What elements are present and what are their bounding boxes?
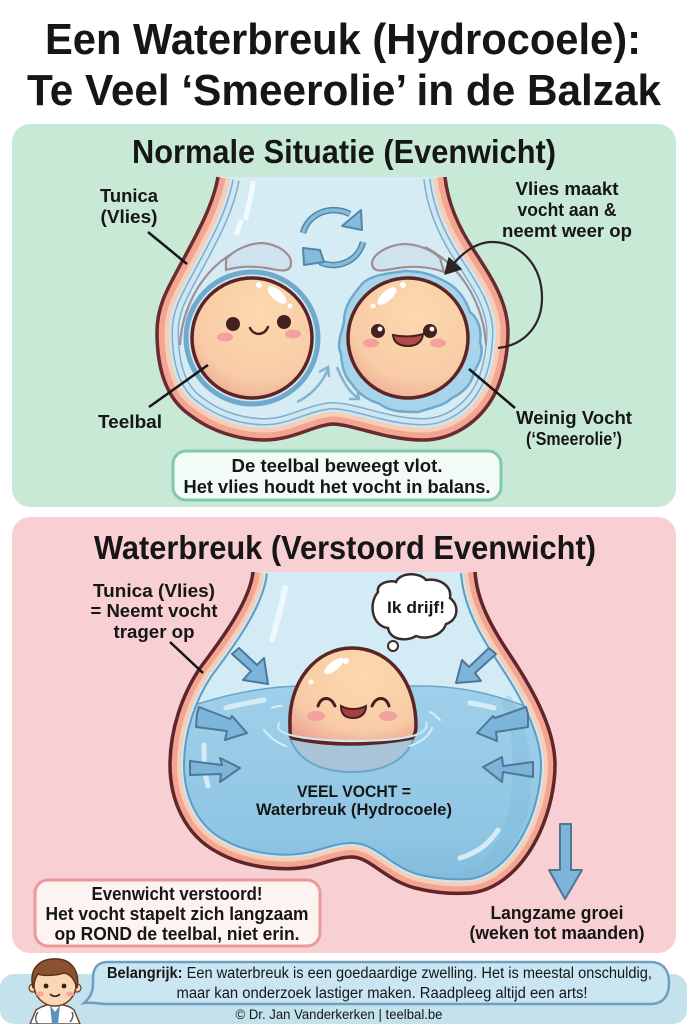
label: tunica slow: = Neemt vocht (90, 600, 218, 621)
callout: balance: Het vlies houdt het vocht in balans. (184, 476, 490, 497)
title: Te Veel ‘Smeerolie’ in de Balzak (27, 66, 661, 115)
footer band (0, 974, 687, 1024)
label: tunica: (Vlies) (100, 206, 158, 227)
icon: doctor (29, 959, 81, 1024)
label: vlies maakt vocht: neemt weer op (502, 220, 632, 241)
label: weinig vocht: (‘Smeerolie’) (526, 428, 622, 449)
label: slow growth: Langzame groei (490, 902, 624, 923)
label: tunica slow: Tunica (Vlies) (93, 580, 215, 601)
arrow: slow growth (549, 824, 582, 899)
label: tunica slow (90, 580, 218, 673)
callout: important note: Belangrijk: Een waterbreuk is een goedaardige zwelling. Het is meestal onschuldig, (107, 965, 652, 982)
icon: pressure arrows (190, 648, 533, 782)
diagram: enlarged scrotum (168, 572, 557, 896)
label: slow growth (470, 902, 644, 943)
callout: disturbed balance: op ROND de teelbal, niet erin. (54, 924, 300, 944)
label: weinig vocht: Weinig Vocht (516, 407, 632, 428)
callout: balance: De teelbal beweegt vlot. (232, 455, 442, 476)
label: tunica slow: trager op (114, 621, 194, 642)
label: tunica: Tunica (100, 185, 159, 206)
label: slow growth: (weken tot maanden) (470, 922, 644, 943)
icon: left membrane cap (226, 243, 291, 270)
heading: hydrocele: Waterbreuk (Verstoord Evenwicht) (94, 529, 596, 566)
label: water text (256, 783, 452, 819)
icon: floating testicle (264, 648, 440, 772)
label: vlies maakt vocht: Vlies maakt (516, 178, 618, 199)
panel: hydrocele (12, 517, 676, 953)
icon: thought bubble (373, 574, 456, 651)
label: teelbal (98, 365, 208, 432)
label: vlies maakt vocht (445, 178, 632, 348)
credit: © Dr. Jan Vanderkerken | teelbal.be (236, 1006, 443, 1022)
icon: thought bubble: Ik drijf! (387, 598, 445, 617)
icon: flow arrows (297, 367, 359, 402)
title: Een Waterbreuk (Hydrocoele): (45, 15, 641, 64)
callout: disturbed balance: Evenwicht verstoord! (92, 884, 262, 904)
water highlights (204, 588, 498, 858)
label: teelbal: Teelbal (98, 411, 162, 432)
icon: right testicle face (348, 278, 468, 398)
label: vlies maakt vocht: vocht aan & (518, 199, 616, 220)
icon: circulation arrows (303, 210, 363, 265)
panel: normal situation (12, 124, 676, 507)
icon: right fluid layer (339, 271, 482, 412)
neck highlights (237, 183, 253, 233)
title (27, 15, 661, 115)
icon: left testicle face (192, 278, 312, 398)
icon: left fluid ring (186, 272, 318, 404)
callout: important note: maar kan onderzoek lastiger maken. Raadpleeg altijd een arts! (176, 985, 588, 1002)
label: weinig vocht (469, 369, 632, 449)
water body (185, 685, 540, 878)
diagram: normal scrotum (157, 177, 508, 440)
icon: right membrane cap (372, 244, 444, 272)
callout: disturbed balance: Het vocht stapelt zich langzaam (46, 904, 308, 924)
callout: balance (173, 451, 501, 500)
label: tunica (100, 185, 187, 264)
callout: disturbed balance (35, 880, 320, 946)
label: water text: VEEL VOCHT = (297, 783, 411, 801)
label: water text: Waterbreuk (Hydrocoele) (256, 801, 452, 819)
heading: normal situation: Normale Situatie (Evenwicht) (132, 133, 556, 170)
icon: membrane lines (180, 243, 486, 345)
callout: important note (84, 962, 669, 1004)
